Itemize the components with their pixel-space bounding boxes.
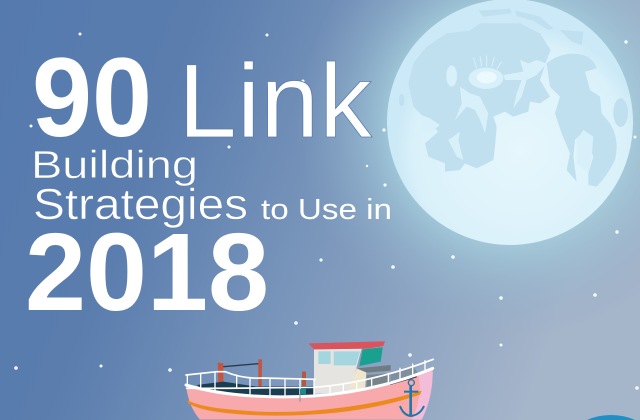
moon glow: [280, 0, 640, 337]
cabin roof: [309, 341, 385, 349]
title: [25, 35, 392, 334]
subtitle: to Use in: to Use in: [261, 194, 392, 226]
railings: [186, 359, 433, 397]
hull: [186, 368, 433, 420]
moon crater rays: [477, 71, 497, 83]
small buoy sign: [300, 389, 306, 394]
full moon: [387, 0, 633, 245]
deck shadow: [197, 382, 313, 396]
subtitle: Building: Building: [31, 144, 198, 187]
title: Link: Link: [178, 43, 372, 160]
blue life ring at the bottom edge: [587, 415, 635, 420]
title: 90: 90: [32, 35, 152, 160]
cabin: [314, 349, 362, 394]
icon: anchor: [400, 380, 424, 416]
cabin windows: [318, 351, 331, 364]
title: 2018: 2018: [25, 211, 269, 334]
moon surface markings: [399, 9, 628, 187]
masts: [218, 363, 223, 393]
fishing boat: [186, 341, 433, 420]
subtitle: Strategies: Strategies: [33, 180, 248, 229]
moon bright streaks: [422, 60, 593, 173]
hull orange stripe: [187, 391, 422, 416]
